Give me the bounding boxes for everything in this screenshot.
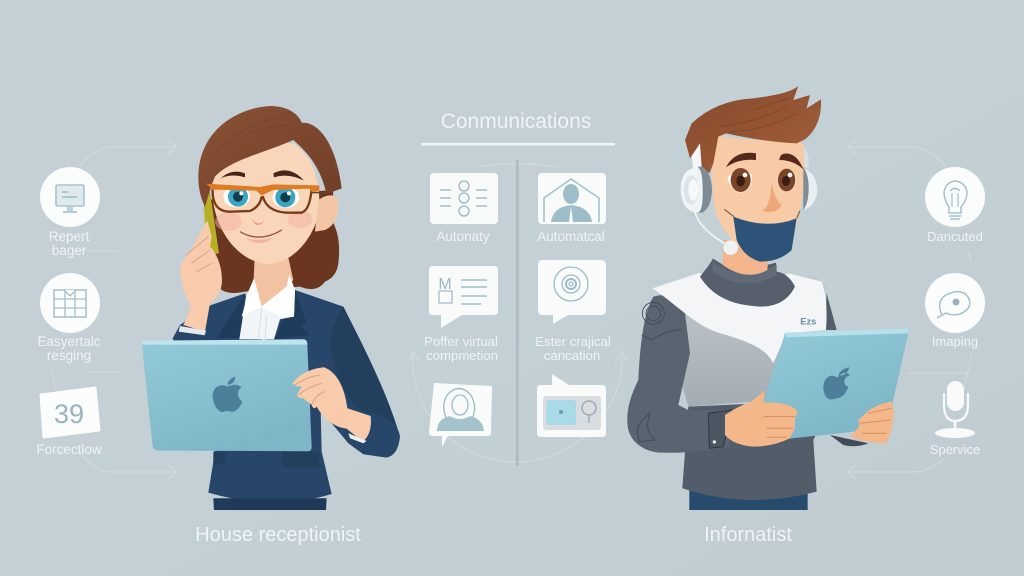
trousers: [689, 490, 808, 510]
shirt cuff: [179, 326, 206, 335]
tablet: [763, 329, 909, 439]
label: imaping: Imaping: [932, 334, 978, 349]
icon: light bulb: [925, 167, 985, 227]
mic boom: [695, 212, 728, 246]
title: Conmunications: [441, 110, 591, 133]
jacket pockets: [213, 452, 320, 468]
mouth: [240, 230, 282, 237]
cheeks: [215, 212, 242, 231]
back arm: [825, 293, 837, 330]
nose: [252, 218, 267, 225]
ear cup right: [804, 168, 817, 210]
card: automated person: [538, 173, 606, 224]
ear cup left: [681, 167, 712, 213]
back hair: [204, 190, 339, 293]
lapels: [217, 290, 310, 339]
cuff: [348, 433, 367, 443]
label: report: Repert: [49, 229, 90, 244]
jacket: [173, 290, 400, 502]
right hand: [850, 402, 894, 443]
label: dancuted: Dancuted: [927, 229, 983, 244]
left hand: [180, 221, 222, 332]
eyebrows: [726, 153, 803, 169]
man informatist: [627, 86, 909, 510]
hair: [685, 86, 821, 173]
shirt: [239, 275, 295, 339]
arm: [627, 295, 730, 453]
card: automaty list: [430, 173, 498, 224]
label: forecast: Forcectlow: [36, 442, 102, 457]
label: automatcal: Automatcal: [537, 229, 605, 244]
card: virtual form bubble: [429, 266, 498, 328]
icon: date card: [41, 388, 99, 437]
icon: monitor: [40, 167, 100, 227]
apple logo: [823, 367, 850, 400]
panel: left feature list: [36, 167, 102, 457]
mask: [733, 217, 797, 262]
neck: [253, 250, 293, 312]
label: poffer virtual: Poffer virtual: [424, 334, 498, 349]
trousers: [213, 498, 327, 510]
centre divider: [516, 160, 519, 466]
caption: informatist: Infornatist: [704, 524, 792, 546]
card: critical spiral bubble: [538, 260, 606, 324]
card: device bubble: [537, 374, 606, 437]
label: cancation: cancation: [544, 348, 600, 363]
eyes: [727, 168, 796, 193]
apple logo: [213, 377, 243, 412]
title underline: [421, 143, 615, 145]
label: bager: bager: [52, 243, 87, 258]
face: [212, 143, 319, 264]
top hair: [198, 106, 342, 207]
neck: [723, 240, 770, 275]
left hand: [725, 390, 798, 447]
vest: [667, 277, 827, 407]
ear: [315, 195, 338, 232]
mouth line: [724, 209, 800, 218]
nose: [762, 183, 782, 212]
icon: date card: 39: [54, 399, 84, 429]
label: ester crajical: Ester crajical: [535, 334, 611, 349]
connector lines and arrows: [52, 140, 972, 479]
icon: speech bubble: [925, 273, 985, 333]
caption: house receptionist: House receptionist: [195, 524, 361, 546]
white yoke: [652, 273, 827, 363]
label: autonaty: Autonaty: [436, 229, 490, 244]
panel: centre communications: [421, 110, 615, 466]
face: [712, 135, 805, 262]
headband: [691, 107, 727, 170]
laptop: [142, 340, 312, 451]
card: virtual form bubble: M: [438, 276, 452, 293]
panel: right feature list: [925, 167, 985, 457]
eyes: [223, 186, 299, 208]
far sleeve: [830, 435, 868, 446]
glasses: [206, 184, 327, 213]
phone: [204, 192, 219, 254]
right hand: [292, 367, 371, 442]
card: headset agent bubble: [429, 383, 492, 447]
label: easy: Easyertalc: [37, 334, 101, 349]
label: resging: resging: [47, 348, 91, 363]
woman receptionist: [142, 106, 400, 510]
eyebrows: [221, 170, 304, 181]
icon: calendar grid: [40, 273, 100, 333]
cuff: [708, 410, 732, 448]
icon: microphone: [935, 381, 975, 438]
label: compmetion: compmetion: [426, 348, 498, 363]
collar: [700, 258, 795, 307]
badge text: Ezs: [800, 316, 816, 326]
sweater body: [682, 400, 833, 500]
label: spervice: Spervice: [930, 442, 980, 457]
